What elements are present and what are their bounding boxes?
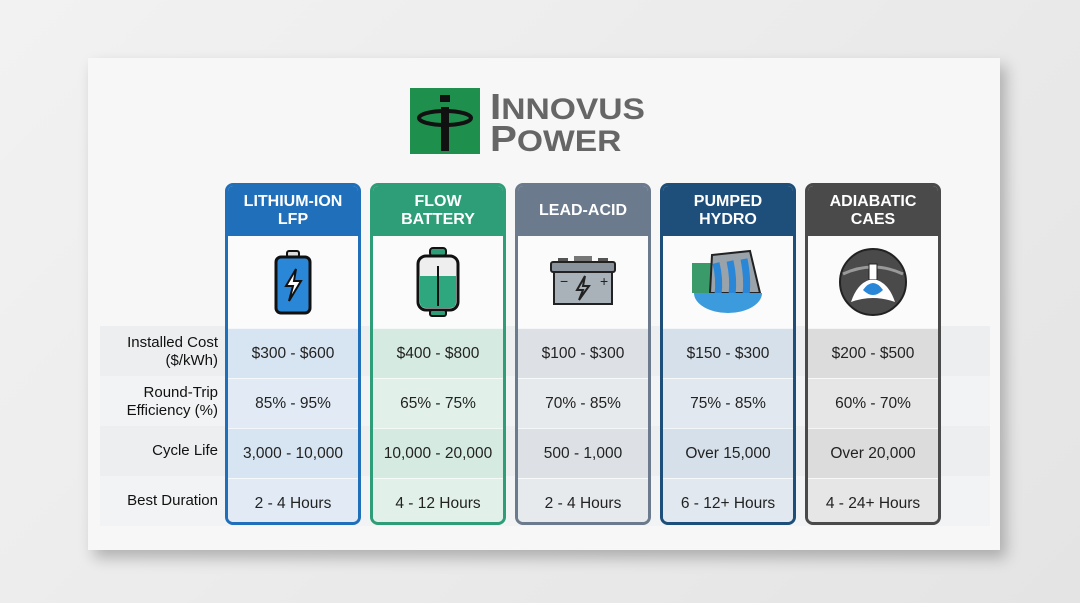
column: adiabatic caes <box>805 183 941 525</box>
column: pumped hydro: HYDRO <box>699 211 757 228</box>
logo text: INNOVUS <box>490 86 645 127</box>
logo <box>410 86 645 159</box>
column: lithium-ion: LITHIUM-ION <box>244 193 342 210</box>
column: lead-acid: 70% - 85% <box>545 394 621 412</box>
column: lithium-ion: 3,000 - 10,000 <box>243 444 343 462</box>
column: adiabatic caes: 60% - 70% <box>835 394 911 412</box>
column: flow battery: 4 - 12 Hours <box>395 494 481 512</box>
icon: dam <box>692 250 762 313</box>
column: flow battery: $400 - $800 <box>397 344 479 362</box>
column: lead-acid: 500 - 1,000 <box>544 444 622 462</box>
row labels: Cycle Life <box>152 442 218 459</box>
column: lithium-ion: $300 - $600 <box>252 344 334 362</box>
icon: logo mark <box>410 88 480 154</box>
row labels <box>127 334 218 509</box>
row labels: Round-Trip <box>144 384 218 401</box>
column: pumped hydro <box>660 183 796 525</box>
column: lead-acid: LEAD-ACID <box>539 202 627 219</box>
column: pumped hydro: 75% - 85% <box>690 394 766 412</box>
row labels: Best Duration <box>127 492 218 509</box>
column: flow battery: 65% - 75% <box>400 394 476 412</box>
column: lithium-ion: 85% - 95% <box>255 394 331 412</box>
row labels: ($/kWh) <box>166 352 218 369</box>
icon: car battery: + <box>600 273 608 289</box>
logo text <box>490 86 645 159</box>
column: flow battery: FLOW <box>414 193 462 210</box>
column: flow battery: BATTERY <box>401 211 475 228</box>
column: pumped hydro: $150 - $300 <box>687 344 769 362</box>
column: adiabatic caes: 4 - 24+ Hours <box>826 494 920 512</box>
column: adiabatic caes: CAES <box>851 211 895 228</box>
column: pumped hydro: Over 15,000 <box>685 444 771 462</box>
column: lithium-ion: LFP <box>278 211 308 228</box>
row labels: Installed Cost <box>127 334 218 351</box>
column: lithium-ion: 2 - 4 Hours <box>255 494 331 512</box>
logo text: POWER <box>490 118 621 159</box>
column: pumped hydro: PUMPED <box>694 193 762 210</box>
column: lithium-ion <box>225 183 361 525</box>
icon: car battery <box>550 256 616 305</box>
column: flow battery <box>370 183 506 525</box>
column: flow battery: 10,000 - 20,000 <box>384 444 492 462</box>
column: lead-acid: 2 - 4 Hours <box>545 494 621 512</box>
icon: battery <box>274 250 312 314</box>
column: lead-acid <box>515 183 651 525</box>
column: pumped hydro: 6 - 12+ Hours <box>681 494 775 512</box>
column: adiabatic caes: ADIABATIC <box>830 193 916 210</box>
row labels: Efficiency (%) <box>127 402 218 419</box>
icon: car battery: − <box>560 273 568 289</box>
column: adiabatic caes: $200 - $500 <box>832 344 914 362</box>
icon: tank <box>416 247 460 317</box>
icon: cavern <box>839 248 907 316</box>
column: lead-acid: $100 - $300 <box>542 344 624 362</box>
card <box>88 58 1000 550</box>
column: adiabatic caes: Over 20,000 <box>830 444 916 462</box>
